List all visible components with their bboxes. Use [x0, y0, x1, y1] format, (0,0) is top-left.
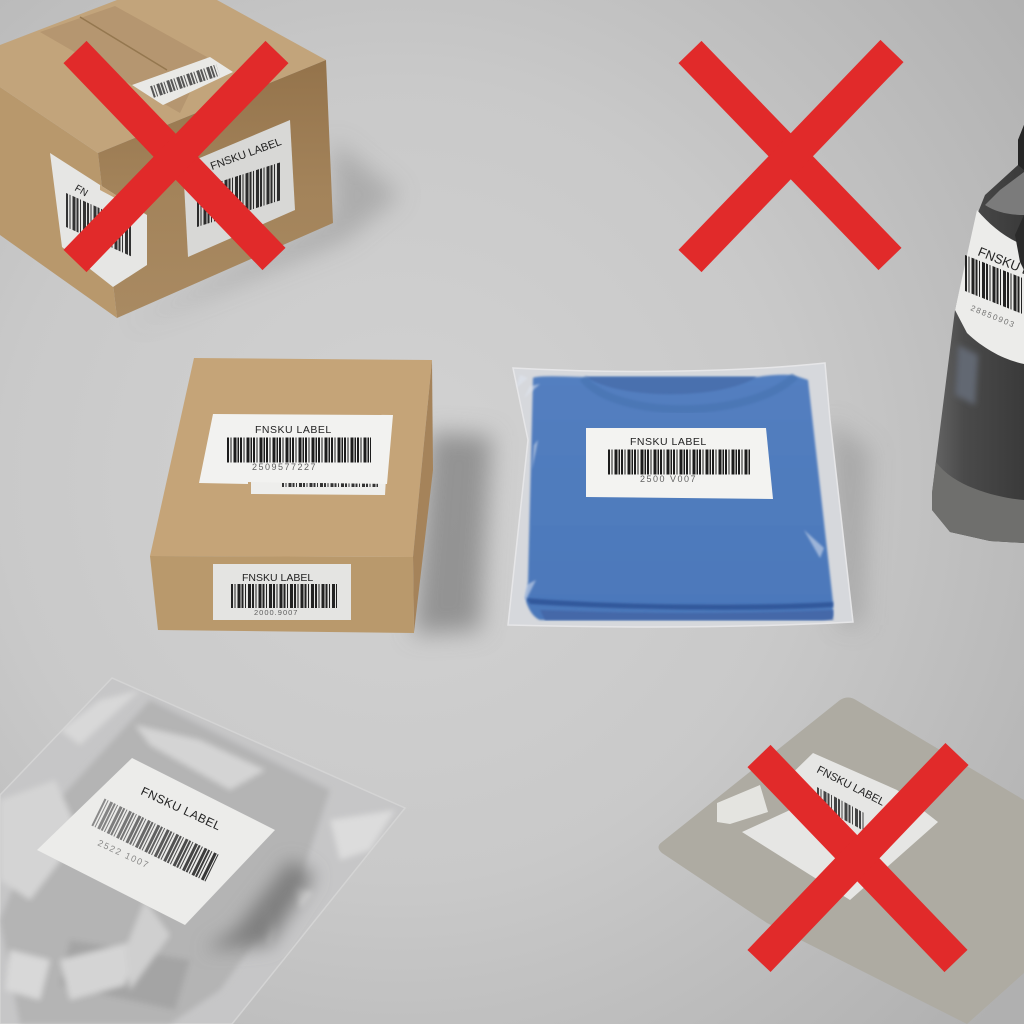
neck back [586, 377, 757, 394]
front label: FNSKU LABEL [242, 572, 313, 584]
label: 2500 V007 [640, 474, 697, 484]
rejected cardboard box, top left [0, 0, 333, 318]
box front [150, 556, 414, 633]
top label [132, 57, 233, 105]
bag label: 2522 1007 [96, 838, 151, 870]
bottle base [932, 462, 1024, 543]
fold shading [526, 598, 833, 610]
valid polybagged blue shirt [508, 363, 853, 627]
bottle label: 28850903 [969, 304, 1017, 330]
label: FNSKU LABEL [630, 436, 707, 448]
top label: 2509577227 [252, 462, 317, 472]
rejected bottle, right edge [932, 125, 1024, 543]
torn label: FNSKU LABEL [815, 764, 887, 809]
shirt body [525, 375, 833, 620]
label [586, 428, 773, 499]
bag label: FNSKU LABEL [139, 784, 223, 833]
front label [213, 564, 351, 620]
valid polybag with crumpled contents, bottom left [0, 678, 405, 1024]
right face [98, 60, 333, 318]
dark crumple [205, 860, 315, 950]
bottle body [932, 125, 1024, 543]
side label right [183, 120, 295, 257]
front label: 2000.9007 [254, 608, 298, 617]
top label: FNSKU LABEL [255, 424, 332, 436]
bag [0, 678, 405, 1024]
box right side [413, 360, 433, 632]
clear polybag [508, 363, 853, 627]
side label left: FN [72, 183, 90, 199]
tape [40, 6, 207, 113]
red cross: bottom right fabric [759, 754, 957, 961]
bottle neck [1018, 125, 1024, 170]
rejected fabric mailer with torn label, bottom right [658, 698, 1024, 1024]
bottle reflection [955, 345, 978, 405]
crumples [0, 690, 395, 1024]
bag label [37, 758, 275, 925]
red cross: top right empty [690, 51, 892, 261]
top face [0, 0, 326, 153]
left face [0, 87, 117, 318]
torn label [717, 753, 938, 900]
bottle label [955, 210, 1024, 364]
red cross: top left box [75, 52, 277, 261]
side label left [50, 153, 147, 287]
fabric [658, 698, 1024, 1024]
side label right: FNSKU LABEL [209, 136, 283, 173]
valid cardboard box, centre left [150, 358, 433, 633]
box top [150, 358, 432, 557]
bag highlights [516, 375, 824, 604]
shadows under items [130, 140, 870, 634]
top label [199, 414, 393, 495]
collar [583, 376, 795, 409]
shoulder highlight [985, 172, 1024, 215]
